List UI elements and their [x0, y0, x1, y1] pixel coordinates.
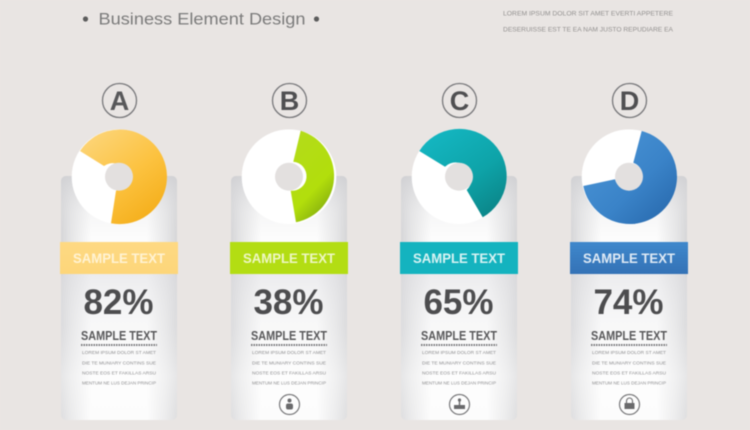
letter badge B [272, 84, 306, 118]
heading: Business Element Design: Business Element Design [98, 10, 306, 28]
body text B: LOREM IPSUM DOLOR ST AMET [252, 350, 326, 355]
body text A: LOREM IPSUM DOLOR ST AMET [82, 350, 156, 355]
pie chart C [412, 129, 507, 224]
body text D: MENTUM NE LUS DEJAN PRINCIP [592, 380, 666, 386]
body text B: MENTUM NE LUS DEJAN PRINCIP [252, 380, 326, 386]
body text A [81, 345, 157, 386]
card B [231, 176, 347, 420]
percentage A: 82% [83, 283, 154, 322]
letter badge D [612, 84, 646, 118]
colour band A [60, 242, 178, 274]
panel: C [400, 84, 518, 420]
body text C: DIE TE MUNIARY CONTINS SUE [422, 360, 496, 366]
icon: books [450, 394, 470, 414]
body text B: DIE TE MUNIARY CONTINS SUE [252, 360, 326, 366]
colour band C [400, 242, 518, 274]
body text B: NOSTE EOS ET FAKILLAS ARSU [252, 370, 326, 376]
subheading C: SAMPLE TEXT [421, 329, 497, 343]
colour band C: SAMPLE TEXT [413, 250, 505, 266]
percentage C: 65% [423, 283, 494, 322]
colour band A: SAMPLE TEXT [73, 250, 165, 266]
body text D [591, 345, 667, 386]
top right caption: LOREM IPSUM DOLOR SIT AMET EVERTI APPETERE [503, 10, 674, 18]
colour band D: SAMPLE TEXT [583, 250, 675, 266]
panel: D [570, 84, 688, 420]
pie chart A [72, 129, 167, 224]
colour band B [230, 242, 348, 274]
panel: B [230, 84, 348, 420]
letter badge C: C [450, 86, 469, 116]
body text D: NOSTE EOS ET FAKILLAS ARSU [592, 370, 666, 376]
body text A: NOSTE EOS ET FAKILLAS ARSU [82, 370, 156, 376]
pie chart D [582, 129, 677, 224]
body text C: NOSTE EOS ET FAKILLAS ARSU [422, 370, 496, 376]
card A [61, 176, 177, 420]
subheading D: SAMPLE TEXT [591, 329, 667, 343]
colour band D [570, 242, 688, 274]
letter badge D: D [620, 86, 639, 116]
body text D: DIE TE MUNIARY CONTINS SUE [592, 360, 666, 366]
icon: bag [620, 394, 640, 414]
icon: people [280, 394, 300, 414]
body text A: DIE TE MUNIARY CONTINS SUE [82, 360, 156, 366]
body text C: LOREM IPSUM DOLOR ST AMET [422, 350, 496, 355]
letter badge C [442, 84, 476, 118]
top right caption [503, 10, 674, 34]
body text C [421, 345, 497, 386]
percentage B: 38% [253, 283, 324, 322]
colour band B: SAMPLE TEXT [243, 250, 335, 266]
top right caption: DESERUISSE EST TE EA NAM JUSTO REPUDIARE EA [503, 26, 674, 34]
percentage D: 74% [593, 283, 664, 322]
subheading A: SAMPLE TEXT [81, 329, 157, 343]
letter badge A: A [110, 86, 129, 116]
card D [571, 176, 687, 420]
letter badge A [102, 84, 136, 118]
card C [401, 176, 517, 420]
body text B [251, 345, 327, 386]
subheading B: SAMPLE TEXT [251, 329, 327, 343]
letter badge B: B [280, 86, 299, 116]
body text A: MENTUM NE LUS DEJAN PRINCIP [82, 380, 156, 386]
body text C: MENTUM NE LUS DEJAN PRINCIP [422, 380, 496, 386]
body text D: LOREM IPSUM DOLOR ST AMET [592, 350, 666, 355]
pie chart B [242, 129, 336, 224]
panel: A [60, 84, 178, 420]
